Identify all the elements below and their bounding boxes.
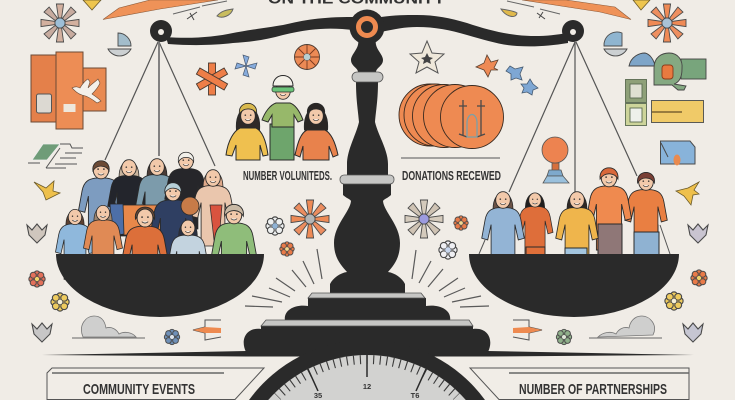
icon: small note (64, 104, 76, 112)
person: blue sweater man (78, 161, 124, 242)
lower shaft (347, 82, 388, 176)
left chains (105, 42, 215, 166)
icon: crown right upper (688, 224, 708, 243)
beam of the scale (150, 15, 584, 46)
person: green shirt with helmet (262, 76, 303, 160)
icon: small badge (36, 94, 52, 113)
volunteers group (226, 76, 338, 160)
icon: crown left lower (32, 323, 52, 342)
person: long peach hair (192, 170, 234, 246)
icon: beige star (410, 41, 444, 73)
orange banner right (522, 0, 631, 20)
panel: number of partnerships (470, 368, 689, 400)
icon: crown left upper (27, 224, 47, 243)
flower: yellow left (51, 293, 69, 311)
upper column (351, 40, 383, 72)
icon: light bulb trophy (542, 137, 569, 183)
person: yellow shirt (226, 103, 268, 160)
person: orange shirt (295, 103, 338, 160)
icon: blue stars (506, 66, 538, 95)
thin strokes and small marks left (173, 1, 233, 20)
icon: yellow star left (34, 181, 60, 200)
flower: red left (29, 271, 45, 287)
right chains (479, 42, 670, 254)
right pan (469, 254, 679, 317)
person: orange shirt tan hair (84, 205, 122, 275)
person: orange cap (586, 168, 632, 255)
icon: orange wheel (294, 44, 320, 70)
orange torso behind (123, 205, 161, 235)
flower: orange right (691, 270, 707, 286)
person: orange sweater center (122, 207, 168, 292)
left pan (56, 254, 264, 317)
icon: cloud right (589, 316, 662, 338)
person: dark top with hood (108, 160, 150, 236)
divider above donations label (401, 157, 500, 159)
blue panel (110, 204, 124, 236)
panel: orange document stack (31, 52, 106, 129)
icon: orange spiky star (476, 55, 498, 77)
flower: yellow right (665, 292, 683, 310)
yellow kite left (83, 0, 101, 10)
dial number right: T6 (411, 391, 419, 400)
icon: cloud left (72, 316, 145, 338)
dial number 12: 12 (363, 382, 371, 391)
scale base (42, 293, 694, 356)
icon: green calculators (626, 80, 646, 126)
person: white hat dark top (165, 152, 207, 229)
flower: blue left (266, 217, 284, 235)
icon: white bird (72, 79, 101, 103)
panel: community events (47, 368, 264, 400)
lower bulb (330, 183, 405, 293)
icon: blue pinwheel (235, 55, 257, 77)
person: blue blouse (482, 192, 524, 268)
icon: blue envelope (660, 141, 695, 166)
label: number volunteers: NUMBER VOLUNITEDS. (243, 169, 332, 183)
label: number of partnerships: NUMBER OF PARTNERSHIPS (519, 381, 667, 398)
person: green sweater with helmet (212, 204, 256, 287)
icon: speech bubble group (629, 53, 706, 90)
person: yellow sweater (556, 192, 598, 268)
label: community events: COMMUNITY EVENTS (83, 381, 195, 398)
icon: green stripes with lines (28, 144, 83, 168)
red scarf strip (210, 205, 222, 240)
dial gauge (249, 340, 485, 400)
person: teal jacket (136, 159, 178, 235)
label: donations received: DONATIONS RECEWED (402, 169, 501, 183)
lower plate (261, 320, 473, 326)
upper collar (352, 72, 383, 82)
left beam end (150, 20, 172, 42)
flower: orange large left of column (283, 192, 337, 246)
flower: beige large right of column (397, 192, 451, 246)
upper plate (308, 293, 425, 298)
icon: spires on coin (459, 100, 485, 137)
icon: large flower top right (640, 0, 694, 50)
person: orange shirt maroon hair (625, 172, 667, 255)
person: child in light blue (168, 220, 208, 292)
orange pet (181, 197, 199, 215)
hub (350, 10, 384, 44)
icon: large flower top left (33, 0, 87, 50)
icon: orange asterisk (196, 63, 228, 95)
radiating lines right (412, 250, 489, 307)
icon: crown right lower (683, 323, 703, 342)
icon: yellow star right (676, 182, 699, 205)
person: light blue shirt woman (56, 209, 94, 279)
person: navy shirt with light blue hat (150, 183, 196, 264)
yellow kite right (633, 0, 650, 10)
tier two (244, 326, 490, 352)
icon: arrow left (193, 320, 221, 340)
scale column (330, 10, 405, 293)
base line (42, 351, 694, 356)
tier one (285, 298, 450, 321)
flower: orange right (454, 216, 468, 230)
icon: arrow right (513, 320, 542, 340)
right beam end (562, 20, 584, 42)
people: right group (482, 168, 667, 268)
icon: pie gauge left (108, 33, 131, 56)
thin strokes and small marks right (501, 1, 560, 19)
coin stack: donations (399, 84, 504, 148)
icon: yellow card (652, 100, 704, 122)
flower: blue right (439, 241, 457, 259)
flower: green bottom (556, 329, 572, 345)
radiating lines left (245, 249, 322, 307)
lower collar (340, 175, 394, 184)
person: orange shirt curly hair (517, 193, 553, 258)
dial number 35: 35 (314, 391, 322, 400)
people: left group (56, 152, 256, 292)
flower: orange left (280, 242, 294, 256)
flower: blue bottom (164, 329, 180, 345)
icon: pie gauge right (604, 32, 627, 56)
orange banner left (103, 0, 218, 20)
